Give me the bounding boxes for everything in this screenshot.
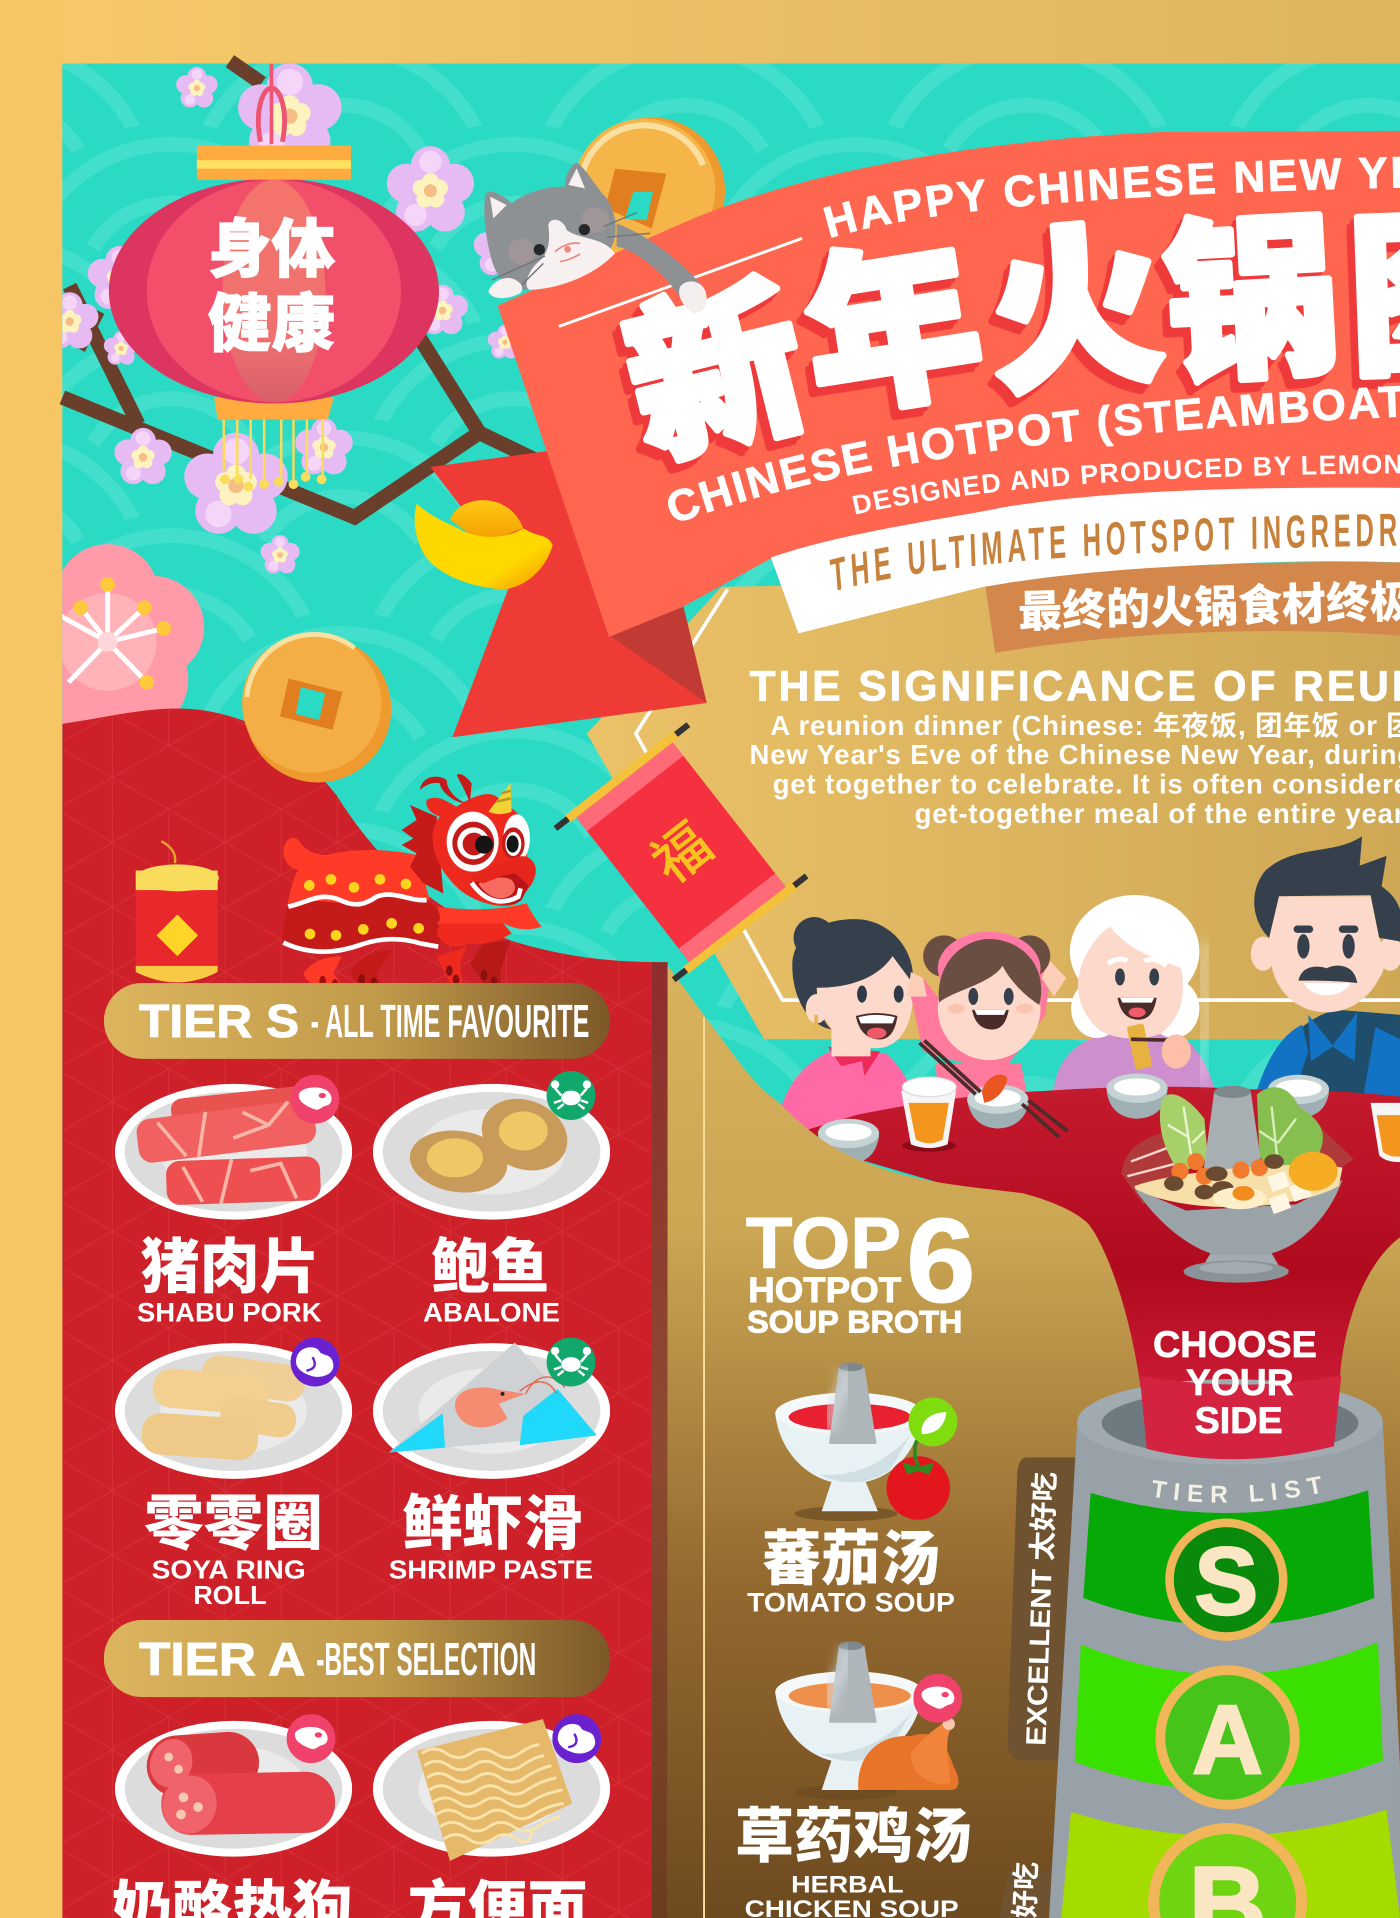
heading: top 6 hotpot soup broth: TOP bbox=[746, 1204, 901, 1284]
label: shabu pork: 猪肉片 bbox=[140, 1219, 320, 1305]
rice bowl grandma bbox=[1107, 1074, 1168, 1119]
reunion dinner description bbox=[750, 710, 1400, 829]
scroll with fu: 福 bbox=[632, 801, 726, 899]
heading: choose your side: SIDE bbox=[1195, 1400, 1283, 1441]
tier A heading pill: TIER A bbox=[139, 1633, 305, 1685]
heading: choose your side: CHOOSE bbox=[1153, 1324, 1317, 1365]
table bowl near mother bbox=[818, 1119, 879, 1164]
label: herbal chicken soup: HERBAL bbox=[791, 1872, 904, 1899]
tier list cylinder bbox=[1049, 1379, 1400, 1918]
family at dinner table bbox=[778, 836, 1400, 1143]
label: herbal chicken soup bbox=[735, 1789, 972, 1918]
large gold coin bbox=[242, 633, 391, 783]
label: abalone: 鲍鱼 bbox=[431, 1219, 550, 1305]
plum tree branches bbox=[62, 61, 550, 517]
hotpot bowl bbox=[1121, 1086, 1354, 1283]
mother bbox=[778, 917, 932, 1143]
heading: top 6 hotpot soup broth: SOUP BROTH bbox=[747, 1304, 962, 1340]
label: herbal chicken soup: 草药鸡汤 bbox=[735, 1789, 972, 1875]
badge: A: A bbox=[1192, 1684, 1263, 1794]
reunion dinner description: get-together meal of the entire year. bbox=[915, 798, 1400, 829]
tag: next tier bbox=[999, 1861, 1076, 1918]
left gold margin bbox=[0, 0, 62, 1918]
main chinese title: 火 bbox=[977, 164, 1172, 429]
label: tomato soup: 蕃茄汤 bbox=[762, 1512, 940, 1598]
child bbox=[907, 932, 1066, 1125]
plate: instant noodles bbox=[373, 1714, 610, 1861]
tag: excellent: EXCELLENT 太好吃 bbox=[1020, 1471, 1061, 1746]
firecracker bbox=[136, 841, 219, 982]
father bbox=[1247, 836, 1400, 1143]
orange ribbon bbox=[985, 562, 1400, 653]
tier S heading pill bbox=[104, 983, 610, 1059]
lion dance bbox=[282, 774, 542, 992]
rice bowl child bbox=[919, 1040, 1067, 1137]
gold lower panel bbox=[668, 966, 1400, 1918]
tier S heading pill: TIER S bbox=[139, 995, 299, 1047]
plate: cheese hotdog bbox=[115, 1714, 352, 1857]
gold panel divider bbox=[703, 1017, 705, 1918]
label: shrimp paste bbox=[389, 1476, 593, 1584]
lantern: 健康 bbox=[208, 273, 335, 365]
cat on banner bbox=[484, 163, 707, 313]
main chinese title: 新 bbox=[598, 217, 828, 502]
scroll with fu bbox=[553, 721, 809, 983]
band: tier S bbox=[1083, 1490, 1374, 1626]
label: soya ring roll: ROLL bbox=[193, 1582, 267, 1610]
heading: choose your side bbox=[1153, 1324, 1317, 1441]
band: tier A bbox=[1075, 1642, 1383, 1790]
gold coin behind banner bbox=[573, 117, 725, 264]
badge: B bbox=[1148, 1823, 1307, 1918]
plum blossoms bbox=[41, 63, 529, 573]
icon: pink flower bbox=[62, 544, 204, 728]
main chinese title bbox=[598, 153, 1400, 502]
soup: tomato bbox=[775, 1363, 957, 1521]
plate: shrimp paste bbox=[373, 1338, 610, 1479]
banner rule bbox=[559, 238, 802, 326]
main chinese title: 年 bbox=[785, 178, 996, 453]
lantern bbox=[109, 64, 439, 492]
badge: S bbox=[1165, 1519, 1287, 1641]
red table and funnel bbox=[783, 1087, 1400, 1467]
tag: excellent bbox=[1008, 1457, 1094, 1761]
teal scallop backdrop bbox=[62, 64, 1400, 1286]
label: soya ring roll: 零零圈 bbox=[144, 1476, 323, 1562]
badge: A bbox=[1155, 1665, 1300, 1810]
steam over hotpot bbox=[1201, 941, 1208, 1082]
label: tomato soup: TOMATO SOUP bbox=[747, 1587, 955, 1617]
funnel into cylinder bbox=[1140, 1376, 1341, 1459]
label: abalone bbox=[423, 1219, 560, 1328]
glass right bbox=[1371, 1103, 1400, 1162]
heading: top 6 hotpot soup broth: 6 bbox=[906, 1195, 976, 1328]
coral title banner bbox=[498, 131, 1400, 637]
gold ingot bbox=[415, 500, 553, 589]
banner credit: DESIGNED AND PRODUCED BY LEMON bbox=[852, 454, 1400, 514]
plate: soya ring roll bbox=[115, 1338, 352, 1479]
main chinese title: 锅 bbox=[1157, 157, 1344, 416]
glass of juice bbox=[901, 1077, 956, 1152]
red envelope flap bbox=[430, 451, 707, 737]
plate: shabu pork bbox=[115, 1075, 352, 1220]
rice bowl father bbox=[1268, 1075, 1329, 1118]
label: shabu pork: SHABU PORK bbox=[137, 1298, 322, 1328]
heading: top 6 hotpot soup broth bbox=[746, 1195, 976, 1340]
label: abalone: ABALONE bbox=[423, 1298, 560, 1328]
label: soya ring roll: SOYA RING bbox=[152, 1556, 306, 1584]
soup: herbal chicken bbox=[775, 1641, 962, 1800]
tier A heading pill bbox=[104, 1620, 610, 1697]
heading: top 6 hotpot soup broth: HOTPOT bbox=[748, 1270, 901, 1310]
label: shrimp paste: 鲜虾滑 bbox=[402, 1476, 583, 1562]
gold octagon panel behind family bbox=[587, 575, 1400, 1039]
white ribbon bbox=[771, 488, 1400, 633]
lantern: 身体 bbox=[208, 198, 335, 290]
tier list label: TIER LIST bbox=[1152, 1476, 1320, 1503]
grandma bbox=[1054, 895, 1219, 1143]
red patterned tier panel bbox=[62, 708, 668, 1918]
label: soya ring roll bbox=[144, 1476, 323, 1610]
tier A heading pill: -BEST SELECTION bbox=[316, 1633, 536, 1685]
label: shrimp paste: SHRIMP PASTE bbox=[389, 1556, 593, 1584]
badge: S: S bbox=[1195, 1529, 1258, 1635]
plate: abalone bbox=[373, 1071, 610, 1220]
tier S heading pill: - ALL TIME FAVOURITE bbox=[311, 995, 589, 1047]
tag: next tier: 好吃 bbox=[1009, 1861, 1042, 1918]
band: tier B bbox=[1061, 1810, 1400, 1918]
heading: choose your side: YOUR bbox=[1186, 1362, 1294, 1403]
